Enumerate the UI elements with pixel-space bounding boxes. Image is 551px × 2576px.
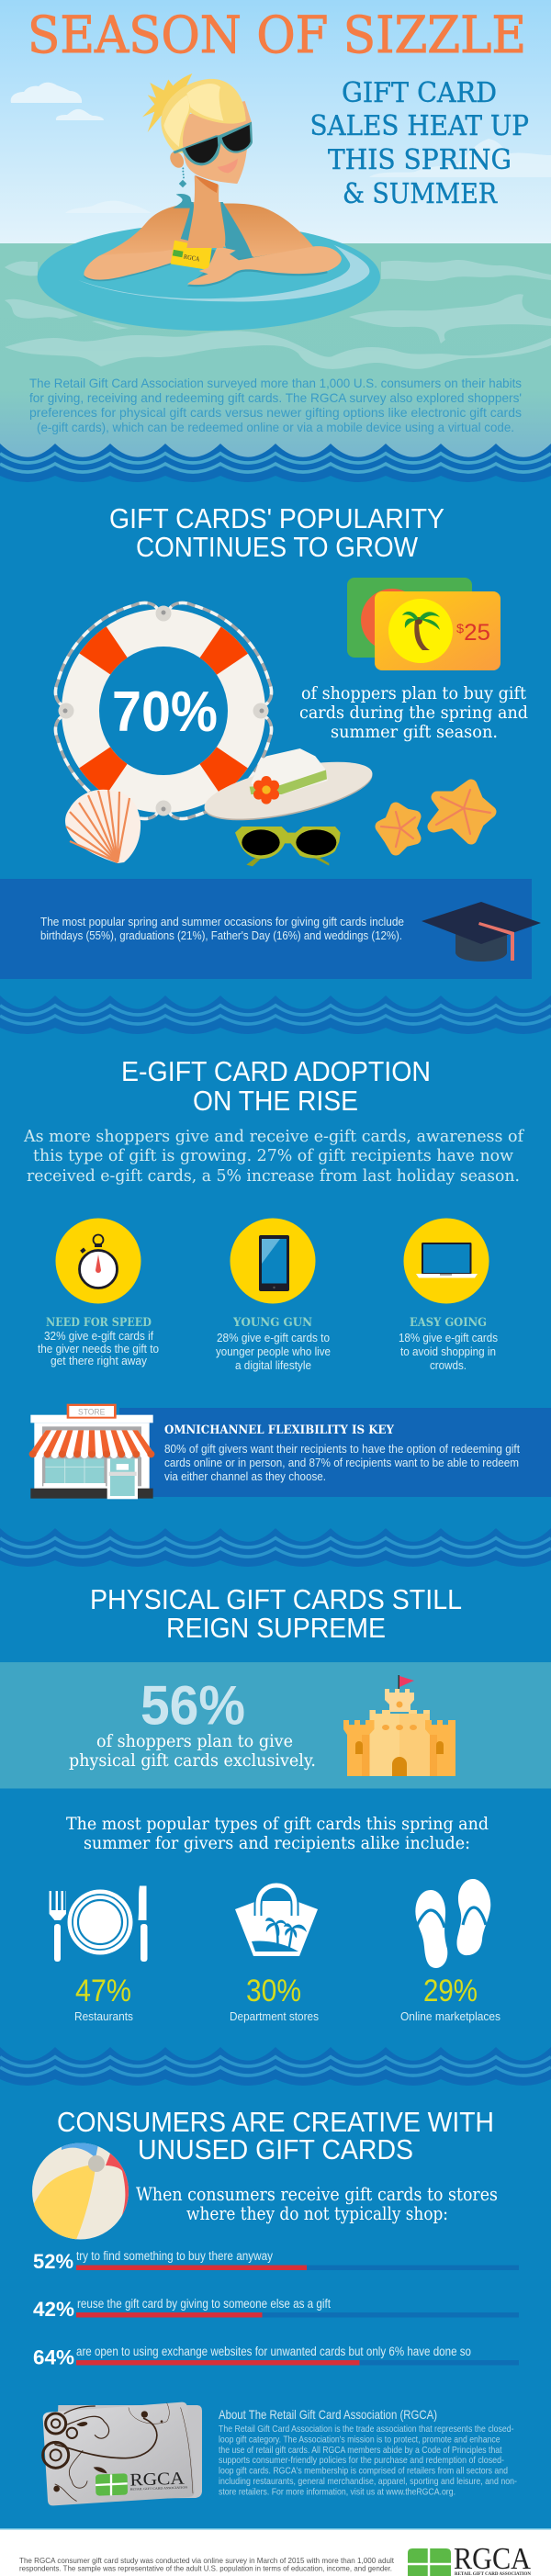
text: 70% caption: cards during the spring and: [299, 703, 528, 723]
text: about RGCA: supports consumer-friendly policies for the purchase and redemption of closed-: [219, 2455, 504, 2466]
RGCA logo: RGCA: [454, 2542, 531, 2576]
heading: e-gift adoption: [121, 1055, 431, 1117]
text: 70% caption: summer gift season.: [331, 722, 498, 742]
title: SEASON OF SIZZLE: [28, 6, 526, 64]
icon: graduation cap: [422, 902, 541, 962]
stat: department stores: [230, 1974, 319, 2023]
RGCA logo: [408, 2542, 531, 2576]
panel: occasions: The most popular spring and summer occasions for giving gift cards include: [40, 915, 404, 928]
icon: store: [29, 1404, 154, 1499]
label: easy going: to avoid shopping in: [400, 1345, 496, 1358]
stat: online marketplaces: [400, 1974, 500, 2023]
subtitle: SALES HEAT UP: [310, 110, 529, 142]
head, hair and sunglasses: [142, 73, 253, 248]
icon: seashell: [65, 790, 141, 863]
heading: popularity: CONTINUES TO GROW: [136, 531, 419, 563]
label: need for speed: 32% give e-gift cards if: [44, 1330, 153, 1343]
text: about RGCA: About The Retail Gift Card Association (RGCA): [219, 2407, 437, 2422]
heading: creative consumers: CONSUMERS ARE CREATIVE WITH: [57, 2106, 494, 2138]
subtitle: & SUMMER: [343, 178, 498, 210]
stat: online marketplaces: Online marketplaces: [400, 2010, 500, 2023]
stat: restaurants: 47%: [75, 1974, 131, 2008]
label: young gun: [216, 1316, 331, 1372]
text: about RGCA: loop gift category. The Association's mission is to protect, promote and enhance: [219, 2434, 500, 2445]
text: when consumers receive: When consumers receive gift cards to stores: [136, 2183, 498, 2205]
icon: gift cards: $: [456, 621, 464, 636]
icon: tablet phone: [230, 1218, 316, 1304]
text: 70% caption: of shoppers plan to buy gift: [301, 683, 526, 703]
bar: 64%: [33, 2345, 519, 2369]
icon: RGCA gift card: RGCA: [129, 2469, 185, 2491]
text: e-gift intro: this type of gift is growing. 27% of gift recipients have now: [33, 1146, 514, 1165]
label: easy going: 18% give e-gift cards: [399, 1332, 498, 1344]
icon: flip flops: [415, 1879, 490, 1968]
icon: life ring with 70%: [48, 595, 279, 827]
heading: e-gift adoption: E-GIFT CARD ADOPTION: [121, 1055, 431, 1087]
subtitle: THIS SPRING: [328, 144, 512, 176]
text: popular types intro: The most popular types of gift cards this spring and: [66, 1814, 489, 1834]
panel: 56% band: of shoppers plan to give: [96, 1731, 293, 1751]
icon: gift cards: [347, 578, 500, 670]
stat: restaurants: Restaurants: [74, 2010, 133, 2023]
intro paragraph: preferences for physical gift cards versus newer gifting options like electronic gift cards: [29, 405, 522, 420]
icon: life ring with 70%: 70%: [112, 681, 218, 744]
label: easy going: [399, 1316, 498, 1372]
sea: [0, 243, 551, 459]
icon: stopwatch: [55, 1218, 141, 1304]
sky: [0, 0, 551, 243]
panel: beach scene: [0, 0, 551, 459]
label: need for speed: get there right away: [51, 1355, 148, 1367]
label: young gun: 28% give e-gift cards to: [217, 1332, 330, 1344]
icon: sun hat: [200, 748, 377, 832]
text: e-gift intro: As more shoppers give and receive e-gift cards, awareness of: [23, 1127, 524, 1146]
footer note: [19, 2556, 395, 2573]
heading: physical cards: REIGN SUPREME: [166, 1612, 386, 1644]
text: about RGCA: [219, 2407, 517, 2498]
icon: gift cards: 25: [464, 620, 490, 646]
panel: occasions: [0, 879, 541, 979]
label: easy going: EASY GOING: [410, 1316, 487, 1330]
wave divider 2: [0, 996, 551, 1034]
icon: RGCA gift card: RETAIL GIFT CARD ASSOCIATION: [130, 2485, 188, 2492]
footer note: respondents. The sample was representative of the adult U.S. population in terms of education, income, and gender.: [19, 2564, 392, 2573]
label: need for speed: the giver needs the gift to: [38, 1343, 159, 1355]
intro paragraph: (e-gift cards), which can be redeemed online or via a mobile device using a virtual code.: [37, 420, 514, 434]
label: young gun: a digital lifestyle: [235, 1359, 311, 1372]
panel: omnichannel: via either channel as they choose.: [164, 1470, 326, 1483]
stat: online marketplaces: 29%: [423, 1974, 478, 2008]
heading: e-gift adoption: ON THE RISE: [193, 1085, 358, 1117]
bar: 42%: reuse the gift card by giving to someone else as a gift: [77, 2297, 331, 2311]
panel: 56% band: [0, 1662, 551, 1789]
label: need for speed: NEED FOR SPEED: [46, 1316, 152, 1330]
label: easy going: crowds.: [430, 1359, 467, 1372]
panel: omnichannel: OMNICHANNEL FLEXIBILITY IS KEY: [164, 1423, 395, 1437]
footer note: The RGCA consumer gift card study was conducted via online survey in March of 2015 with more than 1,000 adult: [19, 2556, 395, 2565]
shoulders and arms: [84, 202, 342, 287]
text: about RGCA: store retailers. For more information, visit us at www.theRGCA.org.: [219, 2487, 455, 2498]
intro paragraph: for giving, receiving and redeeming gift cards. The RGCA survey also explored shoppers': [29, 390, 522, 405]
icon: store: STORE: [78, 1407, 105, 1416]
label: need for speed: [38, 1316, 159, 1367]
text: when consumers receive: where they do not typically shop:: [186, 2202, 448, 2224]
heading: creative consumers: [57, 2106, 494, 2165]
heading: creative consumers: UNUSED GIFT CARDS: [138, 2133, 413, 2165]
label: young gun: YOUNG GUN: [232, 1316, 312, 1330]
wave divider 3: [0, 1528, 551, 1567]
intro paragraph: [29, 376, 522, 434]
icon: starfish: [381, 785, 490, 849]
wave divider 1: [0, 444, 551, 482]
stat: department stores: 30%: [246, 1974, 301, 2008]
awning: [29, 1430, 154, 1458]
heading: physical cards: [90, 1583, 462, 1644]
sea ribbons: [5, 260, 551, 369]
bar: 52%: try to find something to buy there anyway: [76, 2249, 273, 2263]
gift card in hand: [171, 241, 212, 270]
panel: footer: [0, 2528, 551, 2576]
bar: 64%: are open to using exchange websites for unwanted cards but only 6% have done so: [76, 2345, 471, 2358]
bar: 64%: 64%: [33, 2345, 74, 2369]
woman: [84, 73, 342, 287]
panel: 56% band: 56%: [141, 1675, 245, 1736]
bar: 42%: [33, 2297, 519, 2321]
text: e-gift intro: received e-gift cards, a 5% increase from last holiday season.: [27, 1166, 520, 1186]
panel: omnichannel: cards online or in person, and 87% of recipients want to be able to redeem: [164, 1457, 519, 1469]
subtitle: GIFT CARD: [342, 77, 497, 109]
gift card in hand: RGCA: [183, 253, 200, 263]
text: popular types intro: summer for givers and recipients alike include:: [84, 1833, 470, 1853]
bar: 52%: 52%: [33, 2250, 73, 2273]
wave divider 4: [0, 2047, 551, 2086]
panel: omnichannel: 80% of gift givers want their recipients to have the option of redeeming gift: [164, 1443, 520, 1456]
icon: sunglasses: [235, 827, 341, 866]
icon: RGCA gift card: [43, 2402, 202, 2505]
label: young gun: younger people who live: [216, 1345, 331, 1358]
float ring: [38, 223, 380, 331]
heading: popularity: GIFT CARDS' POPULARITY: [109, 502, 444, 534]
heading: physical cards: PHYSICAL GIFT CARDS STILL: [90, 1583, 462, 1615]
starfish markings: [381, 790, 490, 847]
icon: plate and cutlery: [50, 1886, 147, 1962]
subtitle: [310, 77, 529, 210]
panel: 56% band: physical gift cards exclusively.: [69, 1750, 316, 1771]
icon: sand castle: [343, 1675, 455, 1776]
text: when consumers receive: [136, 2183, 498, 2224]
icon: beach bag: [235, 1885, 318, 1956]
card swirls: [55, 2403, 193, 2501]
icon: beach ball: [32, 2143, 129, 2239]
heading: popularity: [109, 502, 444, 563]
intro paragraph: The Retail Gift Card Association surveyed more than 1,000 U.S. consumers on their habits: [29, 376, 522, 390]
clouds: [11, 83, 551, 213]
icon: laptop: [404, 1218, 489, 1304]
text: popular types intro: [66, 1814, 489, 1853]
bar: 52%: [33, 2249, 519, 2273]
stat: department stores: Department stores: [230, 2010, 319, 2023]
bar: 42%: 42%: [33, 2298, 74, 2321]
panel: omnichannel: [119, 1408, 551, 1497]
text: e-gift intro: [23, 1127, 524, 1186]
text: 70% caption: [299, 683, 528, 742]
stat: restaurants: [74, 1974, 133, 2023]
panel: occasions: birthdays (55%), graduations (21%), Father's Day (16%) and weddings (12%).: [40, 928, 402, 942]
